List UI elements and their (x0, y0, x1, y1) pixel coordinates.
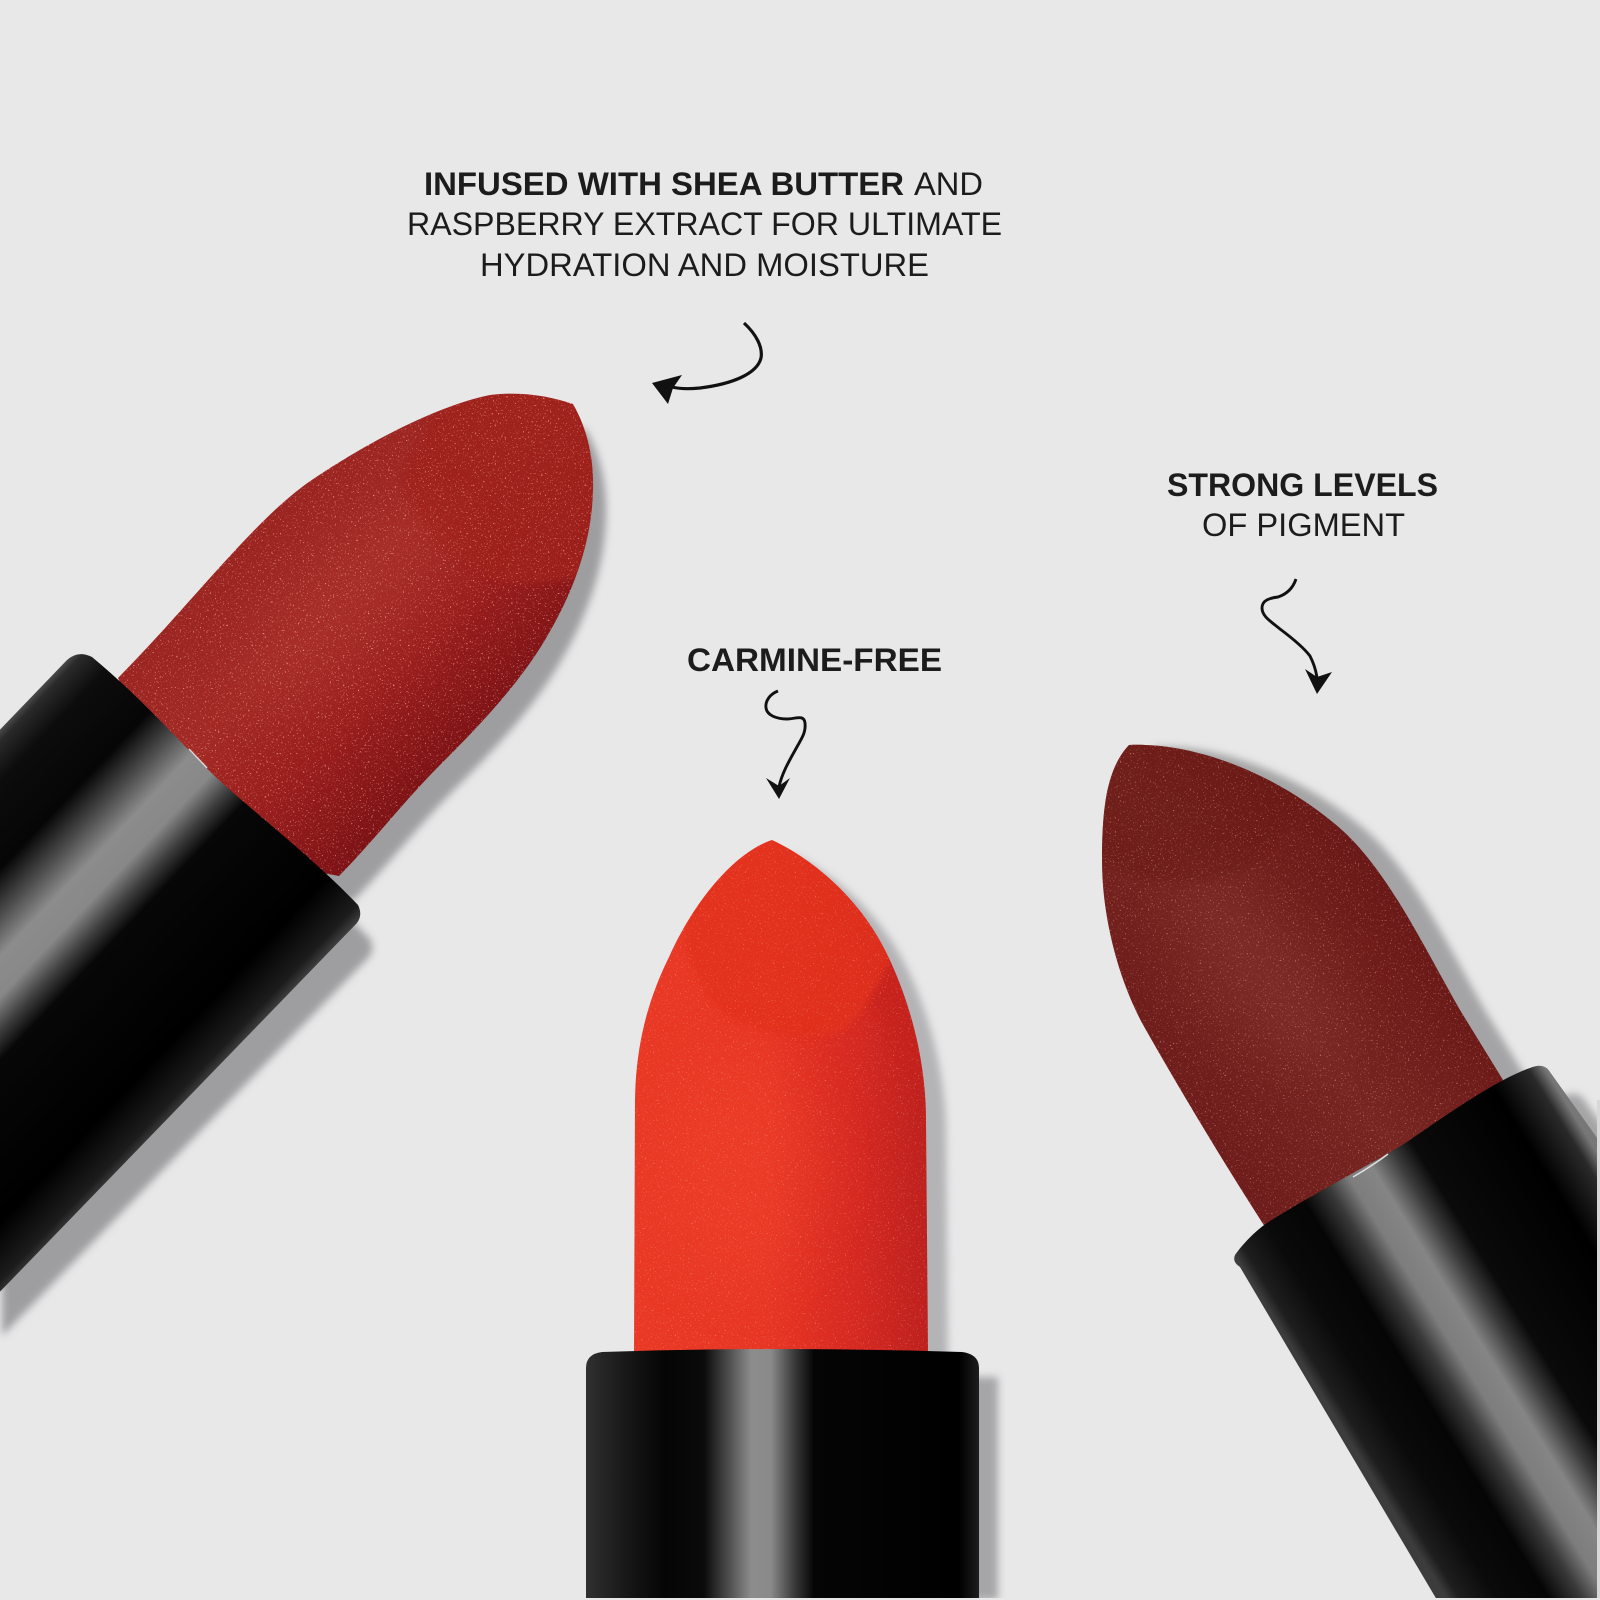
arrow: squiggle toward right lipstick (1262, 579, 1332, 694)
arrow: curved toward left lipstick (652, 323, 761, 404)
bullet facet: center (688, 869, 890, 1032)
bullet facet: left (410, 394, 592, 582)
lipstick bullet: left (118, 394, 594, 876)
bullet facet: right (1102, 744, 1297, 852)
shadow: right lipstick (1155, 747, 1600, 1600)
callout line 1: AND (914, 166, 983, 202)
lipstick tube: center (586, 1349, 979, 1600)
lipstick: right, dark burgundy (1095, 735, 1600, 1600)
lipstick tube: right (1234, 1066, 1600, 1600)
shadow: left lipstick (2, 420, 606, 1336)
lipstick tube: left (0, 654, 360, 1302)
lipstick bullet: center (630, 830, 930, 1355)
callout line 1: STRONG LEVELS (1167, 467, 1438, 503)
callout: shea butter (407, 166, 1002, 283)
lipstick: center, bright red (586, 830, 998, 1600)
callout: strong levels of pigment (1167, 467, 1438, 543)
callout: carmine-free: CARMINE-FREE (687, 642, 942, 678)
arrow: squiggle toward center lipstick (766, 691, 805, 799)
lipstick: left, deep red (0, 380, 620, 1336)
lipstick bullet: right (1095, 735, 1515, 1245)
callout line 2: OF PIGMENT (1202, 507, 1405, 543)
callout line 3: HYDRATION AND MOISTURE (480, 247, 929, 283)
callout line 1: INFUSED WITH SHEA BUTTER (424, 166, 904, 202)
callout line 2: RASPBERRY EXTRACT FOR ULTIMATE (407, 206, 1002, 242)
shadow: center lipstick (610, 854, 998, 1600)
